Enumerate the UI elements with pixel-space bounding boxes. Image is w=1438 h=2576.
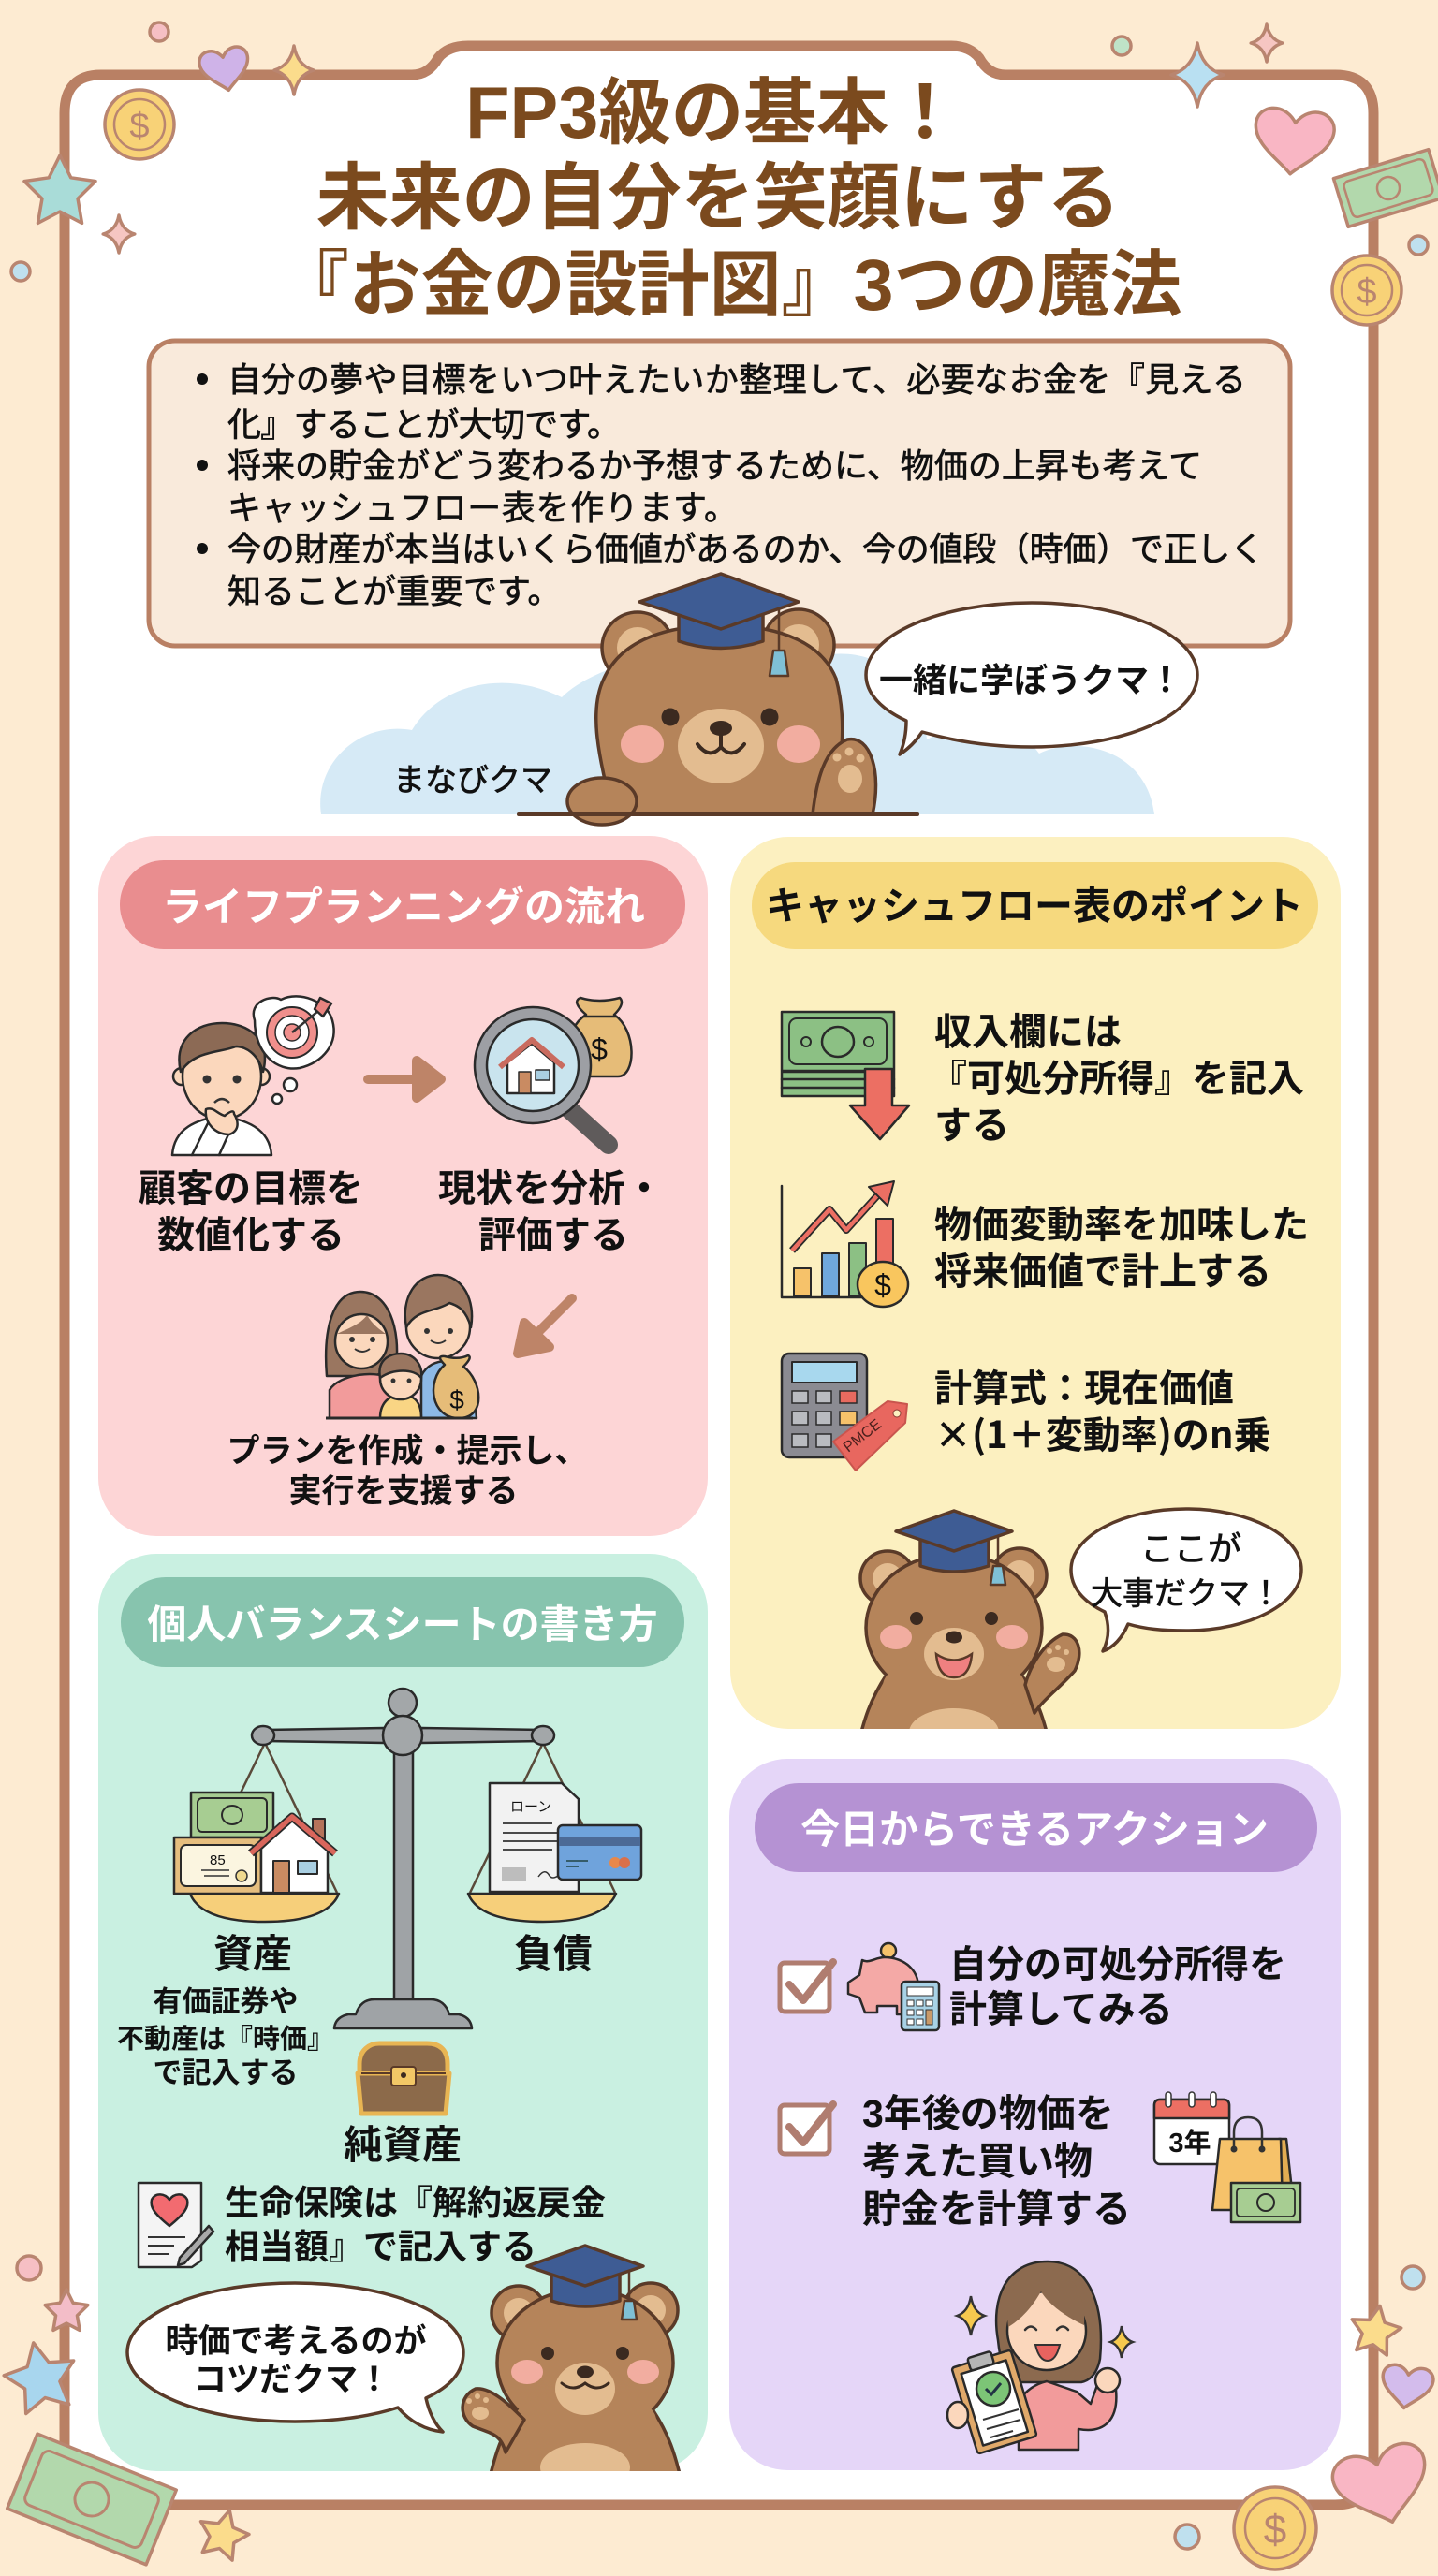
decorations: top-left bbox=[11, 22, 314, 281]
text: step 3 bbox=[227, 1433, 588, 1510]
decorations: bottom-right bbox=[1175, 2266, 1438, 2569]
bullet list bbox=[197, 360, 1264, 610]
heading: actions: 今日からできるアクション bbox=[800, 1808, 1269, 1852]
label: assets: 資産 bbox=[213, 1932, 292, 1976]
text: formula bbox=[934, 1368, 1270, 1459]
icon: assets bbox=[174, 1793, 335, 1894]
icon: rising chart bbox=[782, 1181, 908, 1307]
bullet list: 自分の夢や目標をいつ叶えたいか整理して、必要なお金を『見える bbox=[227, 360, 1246, 399]
icon: client thinking about target bbox=[172, 996, 334, 1155]
speech bubble: cash flow: ここが bbox=[1140, 1530, 1241, 1568]
text: action 2: 3年後の物価を bbox=[862, 2092, 1114, 2135]
mascot speech bubble bbox=[866, 603, 1197, 754]
text: income: 収入欄には bbox=[934, 1012, 1122, 1053]
title: FP3級の基本！ bbox=[465, 73, 961, 154]
text: assets note: で記入する bbox=[154, 2056, 298, 2089]
text: action 1: 計算してみる bbox=[949, 1989, 1173, 2030]
cloud behind mascot bbox=[320, 647, 1154, 814]
heading: life planning: ライフプランニングの流れ bbox=[162, 886, 645, 930]
icon: liabilities bbox=[490, 1783, 641, 1892]
text: action 2: 考えた買い物 bbox=[862, 2140, 1093, 2183]
heading: actions bbox=[755, 1783, 1317, 1872]
text: life insurance: 生命保険は『解約返戻金 bbox=[225, 2184, 606, 2222]
decorations: top-left: $ bbox=[129, 107, 150, 146]
text: income: する bbox=[934, 1105, 1009, 1147]
text: action 2: 貯金を計算する bbox=[862, 2188, 1131, 2231]
graduation cap bbox=[639, 574, 799, 676]
heading: life planning bbox=[120, 860, 685, 949]
icon: magnifier house money bag: $ bbox=[591, 1032, 608, 1066]
panel: actions bbox=[729, 1759, 1341, 2470]
text: action 1: 自分の可処分所得を bbox=[949, 1944, 1286, 1985]
bullet list: 知ることが重要です。 bbox=[227, 572, 561, 610]
icon: family with money bag bbox=[326, 1275, 478, 1418]
text: step 2: 現状を分析・ bbox=[438, 1168, 663, 1209]
decorations: top-right bbox=[1112, 24, 1438, 325]
bear: cash flow bbox=[858, 1509, 1081, 1729]
title: 『お金の設計図』3つの魔法 bbox=[277, 245, 1181, 326]
bullet list: 化』することが大切です。 bbox=[227, 405, 621, 444]
speech bubble: balance sheet: 時価で考えるのが bbox=[166, 2323, 426, 2360]
text: step 3: プランを作成・提示し、 bbox=[227, 1433, 588, 1470]
text: step 1: 数値化する bbox=[157, 1215, 345, 1256]
heading: cash flow bbox=[752, 862, 1318, 949]
text: life insurance bbox=[225, 2184, 606, 2266]
speech bubble: balance sheet: コツだクマ！ bbox=[194, 2362, 390, 2398]
title bbox=[277, 73, 1181, 326]
chart: balance scale bbox=[190, 1689, 616, 2028]
text: step 2 bbox=[438, 1168, 663, 1256]
raised paw bbox=[813, 739, 876, 814]
heading: balance sheet bbox=[121, 1577, 684, 1667]
bear: balance sheet bbox=[462, 2246, 682, 2492]
decorations: bottom-left bbox=[0, 2256, 254, 2565]
summary box bbox=[149, 341, 1290, 646]
text: life insurance: 相当額』で記入する bbox=[225, 2228, 536, 2266]
panel: balance sheet bbox=[98, 1554, 708, 2492]
mascot name: まなびクマ bbox=[393, 763, 552, 798]
title: 未来の自分を笑顔にする bbox=[316, 156, 1120, 239]
decorations: top-right: $ bbox=[1357, 272, 1377, 312]
icon: magnifier house money bag bbox=[475, 998, 632, 1145]
icon: assets: 85 bbox=[210, 1852, 226, 1868]
icon: checkbox 2 bbox=[780, 2104, 833, 2154]
illustration: happy woman with clipboard bbox=[947, 2261, 1133, 2454]
heading: balance sheet: 個人バランスシートの書き方 bbox=[147, 1603, 658, 1647]
mascot bear bbox=[519, 574, 917, 825]
icon: liabilities: ローン bbox=[510, 1799, 551, 1815]
text: action 2 bbox=[862, 2092, 1131, 2231]
icon: calculator and price tag: PMCE bbox=[841, 1416, 885, 1456]
text: assets note: 有価証券や bbox=[154, 1985, 298, 2018]
heading: cash flow: キャッシュフロー表のポイント bbox=[766, 885, 1303, 928]
text: assets note: 不動産は『時価』 bbox=[117, 2024, 334, 2055]
bullet list: 今の財産が本当はいくら価値があるのか、今の値段（時価）で正しく bbox=[227, 530, 1264, 568]
speech bubble: cash flow bbox=[1071, 1509, 1301, 1651]
icon: calendar, shopping bag and money: 3年 bbox=[1168, 2128, 1211, 2159]
icon: family with money bag: $ bbox=[449, 1385, 464, 1414]
icon: treasure chest bbox=[358, 2043, 449, 2114]
text: inflation bbox=[934, 1205, 1309, 1293]
icon: calculator and price tag bbox=[782, 1354, 907, 1471]
text: assets note bbox=[117, 1985, 334, 2089]
decorations: bottom-right: $ bbox=[1264, 2507, 1286, 2553]
panel: cash flow bbox=[730, 837, 1341, 1757]
text: action 1 bbox=[949, 1944, 1286, 2030]
speech bubble: cash flow: 大事だクマ！ bbox=[1091, 1576, 1282, 1612]
label: net assets: 純資産 bbox=[344, 2123, 462, 2167]
icon: piggy bank and calculator bbox=[848, 1943, 939, 2030]
text: income: 『可処分所得』を記入 bbox=[930, 1059, 1304, 1100]
mascot speech bubble: 一緒に学ぼうクマ！ bbox=[879, 661, 1182, 699]
label: liabilities: 負債 bbox=[514, 1932, 593, 1976]
bullet list: キャッシュフロー表を作ります。 bbox=[227, 489, 738, 527]
icon: money with down arrow bbox=[782, 1012, 909, 1139]
arrow diagonal down-left bbox=[518, 1298, 572, 1354]
text: inflation: 物価変動率を加味した bbox=[934, 1205, 1309, 1246]
text: step 1 bbox=[139, 1168, 363, 1256]
speech bubble: balance sheet bbox=[127, 2283, 463, 2432]
bullet list: 将来の貯金がどう変わるか予想するために、物価の上昇も考えて bbox=[227, 446, 1202, 485]
text: step 2: 評価する bbox=[478, 1215, 628, 1256]
icon: calendar, shopping bag and money bbox=[1154, 2092, 1300, 2222]
text: inflation: 将来価値で計上する bbox=[934, 1251, 1271, 1293]
icon: checkbox 1 bbox=[780, 1962, 833, 2012]
text: formula: ×(1＋変動率)のn乗 bbox=[934, 1405, 1270, 1459]
panel: life planning bbox=[98, 836, 708, 1536]
text: income bbox=[930, 1012, 1304, 1147]
icon: insurance document bbox=[139, 2183, 213, 2267]
arrow right bbox=[368, 1061, 441, 1098]
text: step 1: 顧客の目標を bbox=[139, 1168, 363, 1209]
text: formula: 計算式：現在価値 bbox=[934, 1368, 1234, 1410]
icon: rising chart: $ bbox=[874, 1268, 891, 1302]
text: step 3: 実行を支援する bbox=[288, 1473, 519, 1510]
